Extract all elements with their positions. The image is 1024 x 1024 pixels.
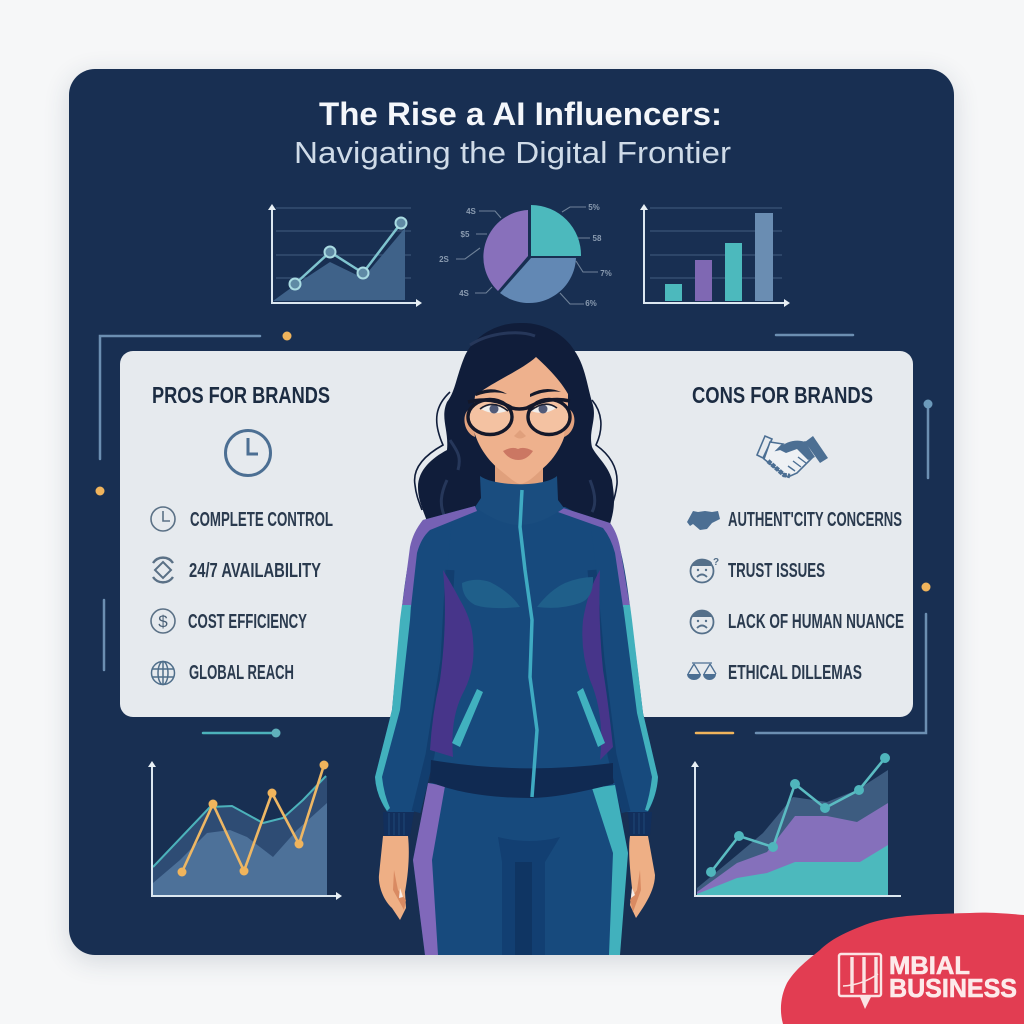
- icon: chat chart: [839, 954, 881, 1009]
- right hand: [629, 836, 655, 918]
- item: authenticity concerns: [687, 509, 902, 531]
- face: [472, 357, 568, 484]
- wordmark: MBIAL: [889, 952, 970, 980]
- chart: pie with percentage labels: 58: [593, 234, 602, 243]
- chart: bottom-right stacked area: [691, 753, 901, 896]
- logo badge: [781, 913, 1024, 1024]
- eyes: [480, 404, 557, 414]
- sleeve stripes: [375, 506, 658, 811]
- chart: top-left line and area: [268, 204, 422, 307]
- person: woman in tracksuit: [375, 323, 658, 955]
- item: complete control: COMPLETE CONTROL: [190, 509, 333, 531]
- right sleeve: [560, 507, 658, 812]
- item: cost efficiency: COST EFFICIENCY: [188, 611, 307, 633]
- eyebrows: [476, 389, 561, 397]
- lips: [503, 448, 533, 460]
- sleeve shading: [416, 570, 626, 812]
- chart: pie with percentage labels: 6%: [585, 299, 597, 308]
- item: trust issues: TRUST ISSUES: [728, 560, 825, 582]
- chart: pie with percentage labels: [439, 203, 612, 308]
- glasses lenses: [468, 400, 570, 434]
- zipper: [520, 490, 537, 797]
- item: availability: 24/7 AVAILABILITY: [189, 560, 321, 582]
- chart: pie with percentage labels: $5: [461, 230, 470, 239]
- cuffs: [383, 812, 652, 836]
- chart: pie with percentage labels: 7%: [600, 269, 612, 278]
- item: availability: [153, 558, 321, 582]
- item: cost efficiency: $: [158, 612, 168, 631]
- collar: [475, 476, 564, 525]
- item: global reach: [152, 661, 294, 685]
- ears: [464, 408, 574, 437]
- panel heading: cons: CONS FOR BRANDS: [692, 382, 873, 408]
- white gap between arm and torso: [443, 658, 449, 700]
- background card: [69, 69, 954, 955]
- item: global reach: GLOBAL REACH: [189, 662, 294, 684]
- icon: large clock: [226, 430, 270, 476]
- left hand: [379, 836, 409, 920]
- pants: [413, 783, 628, 955]
- logo badge: BUSINESS: [889, 973, 1017, 1003]
- icon: large handshake: [757, 436, 828, 477]
- title block: [294, 96, 731, 170]
- subtitle: Navigating the Digital Frontier: [294, 135, 731, 170]
- item: cost efficiency: [151, 609, 307, 633]
- chart: top-right bar chart: [640, 204, 790, 307]
- nose: [514, 430, 526, 438]
- chest highlights: [462, 577, 593, 608]
- chart: pie with percentage labels: 4S: [466, 207, 477, 216]
- torso: [430, 507, 612, 770]
- panel heading: pros: PROS FOR BRANDS: [152, 382, 330, 408]
- glasses: [468, 400, 570, 434]
- waistband: [430, 760, 613, 798]
- item: ethical dilemmas: ETHICAL DILLEMAS: [728, 662, 862, 684]
- item: trust issues: [690, 557, 825, 582]
- side panels: [430, 570, 613, 760]
- item: trust issues: ?: [713, 557, 719, 568]
- panel: pros and cons: [120, 351, 913, 717]
- pockets: [452, 688, 605, 747]
- item: authenticity concerns: AUTHENT'CITY CONCERNS: [728, 509, 902, 531]
- decorative connectors: [96, 332, 932, 738]
- item: lack of human nuance: LACK OF HUMAN NUANCE: [728, 611, 904, 633]
- chart: pie with percentage labels: 2S: [439, 255, 450, 264]
- item: ethical dilemmas: [687, 662, 862, 684]
- item: complete control: [151, 507, 333, 531]
- chart: pie with percentage labels: 4S: [459, 289, 470, 298]
- chart: pie with percentage labels: 5%: [588, 203, 600, 212]
- hair: [415, 323, 617, 524]
- neck: [495, 462, 543, 492]
- title: The Rise a AI Influencers:: [319, 96, 722, 132]
- badge shape: [781, 913, 1024, 1024]
- left sleeve: [375, 506, 475, 812]
- chart: bottom-left area with orange line: [148, 760, 342, 900]
- item: lack of human nuance: [690, 610, 904, 634]
